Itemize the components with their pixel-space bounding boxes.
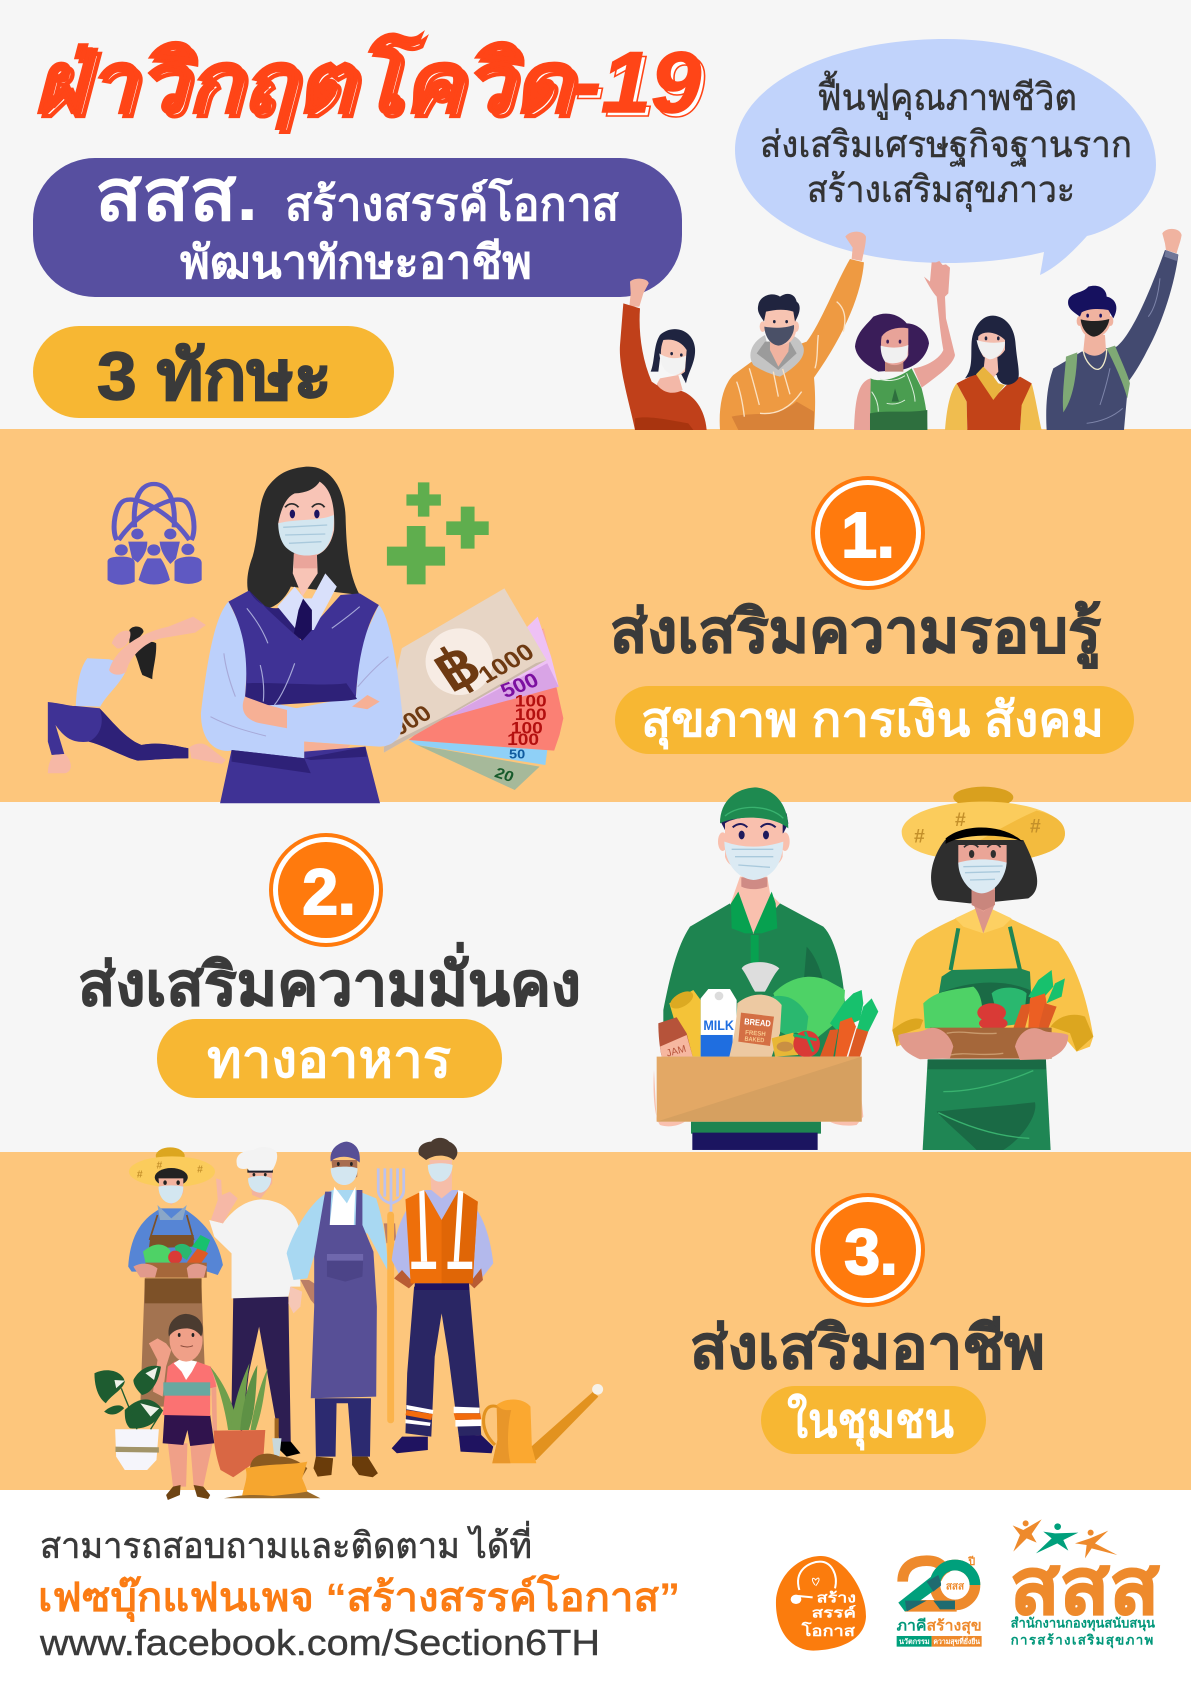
logo: thaihealth sss: การสร้างเสริมสุขภาพ <box>1011 1633 1153 1649</box>
person: farmer woman with apron and basket <box>892 787 1093 1150</box>
pill: food <box>157 1019 502 1098</box>
groceries: FRESH <box>745 1029 766 1038</box>
heading: develop career skills: พัฒนาทักษะอาชีพ <box>180 236 532 288</box>
number badge 2 <box>269 833 383 947</box>
title: ฝ่าวิกฤตโควิด-19 <box>37 36 705 135</box>
logo: thaihealth sss <box>1010 1517 1159 1649</box>
person: waving boy <box>149 1314 217 1500</box>
icon: banknotes fan: 1000 <box>473 639 539 689</box>
number badge 1 <box>811 476 925 590</box>
footer contact text: เฟซบุ๊กแฟนเพจ “สร้างสรรค์โอกาส” <box>38 1574 680 1623</box>
icon: banknotes fan: 100 <box>515 692 547 710</box>
heading: section 2: ส่งเสริมความมั่นคง <box>78 942 581 1018</box>
number badge 3: 3. <box>844 1216 898 1288</box>
icon: banknotes fan: 000 <box>386 701 437 741</box>
person: farmer man: # <box>197 1165 203 1176</box>
groceries: MILK <box>703 1017 734 1033</box>
panel: 3 skills yellow pill: 3 ทักษะ <box>97 338 332 414</box>
speech bubble <box>735 39 1156 275</box>
illustration: section 2 <box>654 787 1093 1150</box>
bubble text lines: ส่งเสริมเศรษฐกิจฐานราก <box>760 124 1132 167</box>
illustration: section 3 <box>94 1138 603 1500</box>
person: farmer man: # <box>137 1170 143 1181</box>
panel: purple heading pill <box>33 156 682 297</box>
icon: green plus signs <box>387 482 489 584</box>
logo: 20 years partner: ปี <box>967 1555 975 1568</box>
logo: section 6 creating opportunity: สรรค์ <box>812 1604 856 1620</box>
band: section 1 background <box>0 429 1191 802</box>
groceries: BAKED <box>744 1036 765 1044</box>
icon: banknotes fan: 100 <box>507 730 539 749</box>
pill: in community: ในชุมชน <box>787 1392 954 1451</box>
footer contact text <box>38 1521 680 1663</box>
pill: health finance society: สุขภาพ การเงิน สังคม <box>641 694 1104 750</box>
logo: thaihealth sss: สสส <box>1010 1542 1159 1630</box>
person: man in navy shirt with backpack <box>1046 229 1182 430</box>
bubble text lines: สร้างเสริมสุขภาวะ <box>807 169 1075 212</box>
heading: creating opportunity: สร้างสรรค์โอกาส <box>285 177 620 230</box>
icon: community science group <box>108 484 202 585</box>
icon: soil sack with trowel <box>224 1418 320 1498</box>
person: woman in yellow shirt and red vest <box>945 316 1042 430</box>
number badge 1: 1. <box>841 499 895 571</box>
icon: banknotes fan <box>384 588 563 790</box>
plant: aloe in terracotta pot <box>210 1363 268 1477</box>
person: chef <box>209 1147 302 1457</box>
logo: 20 years partner: สสส <box>946 1581 965 1592</box>
pitchfork <box>378 1168 404 1423</box>
icon: banknotes fan: 20 <box>492 765 516 786</box>
logo: section 6 creating opportunity: สร้าง <box>817 1590 856 1606</box>
heading: section 3: ส่งเสริมอาชีพ <box>690 1314 1045 1381</box>
person: apron gardener <box>287 1142 404 1477</box>
icon: yoga woman <box>48 617 226 773</box>
person: farmer woman with apron and basket: # <box>914 827 925 848</box>
heading: section 1: ส่งเสริมความรอบรู้ <box>610 598 1101 669</box>
groceries: JAM <box>665 1044 687 1060</box>
groceries <box>658 962 878 1060</box>
logo: 20 years partner: ภาคีสร้างสุข <box>897 1618 982 1635</box>
footer contact text: สามารถสอบถามและติดตาม ได้ที่ <box>40 1521 532 1566</box>
icon: three jumping figures <box>1010 1517 1123 1558</box>
band: section 3 background <box>0 1152 1191 1490</box>
icon: banknotes fan: 50 <box>509 747 526 761</box>
person: business woman with arms crossed <box>201 467 403 803</box>
footer contact text: www.facebook.com/Section6TH <box>39 1622 600 1663</box>
title: ฝ่าวิกฤตโควิด-19 <box>33 32 701 131</box>
person: delivery man with grocery box <box>654 787 878 1150</box>
logo: 20 years partner: นวัตกรรม <box>899 1637 930 1646</box>
pill: in community <box>761 1386 986 1454</box>
icon: banknotes fan: 100 <box>511 718 543 737</box>
person: farmer man: # <box>156 1160 163 1171</box>
pill: food: ทางอาหาร <box>207 1031 451 1089</box>
bubble text lines <box>760 70 1132 212</box>
illustration: crowd left pair <box>620 232 866 430</box>
person: road worker in orange vest <box>392 1138 493 1453</box>
logo: thaihealth sss: สำนักงานกองทุนสนับสนุน <box>1011 1615 1156 1631</box>
number badge 3 <box>811 1193 925 1307</box>
icon: banknotes fan: 500 <box>497 669 542 703</box>
person: man in orange hoodie <box>720 232 866 430</box>
person: woman with purple hair in green top <box>854 261 955 430</box>
heading: sss organisation: สสส. <box>95 156 258 236</box>
person: farmer woman with apron and basket: # <box>955 810 966 831</box>
person: woman in red sweater <box>620 279 707 430</box>
person: farmer woman with apron and basket: # <box>1030 816 1041 837</box>
band: footer background <box>0 1490 1191 1684</box>
number badge 2: 2. <box>302 856 356 928</box>
plant: monstera in white pot <box>94 1366 163 1470</box>
illustration: section 1 <box>48 467 563 803</box>
groceries: BREAD <box>744 1016 771 1029</box>
icon: banknotes fan: 100 <box>515 705 547 724</box>
logo: section 6 creating opportunity <box>776 1556 866 1651</box>
icon: watering can <box>484 1384 603 1463</box>
panel: 3 skills yellow pill <box>33 326 394 418</box>
illustration: crowd right trio <box>854 229 1182 430</box>
logo: 20 years partner <box>897 1555 982 1647</box>
pill: health finance society <box>615 686 1134 754</box>
bubble text lines: ฟื้นฟูคุณภาพชีวิต <box>817 70 1077 120</box>
logo: 20 years partner: ความสุขที่ยั่งยืน <box>933 1635 980 1646</box>
person: farmer man <box>128 1147 223 1407</box>
icon: banknotes fan: ฿ <box>422 632 492 703</box>
logo: section 6 creating opportunity: โอกาส <box>800 1621 856 1640</box>
